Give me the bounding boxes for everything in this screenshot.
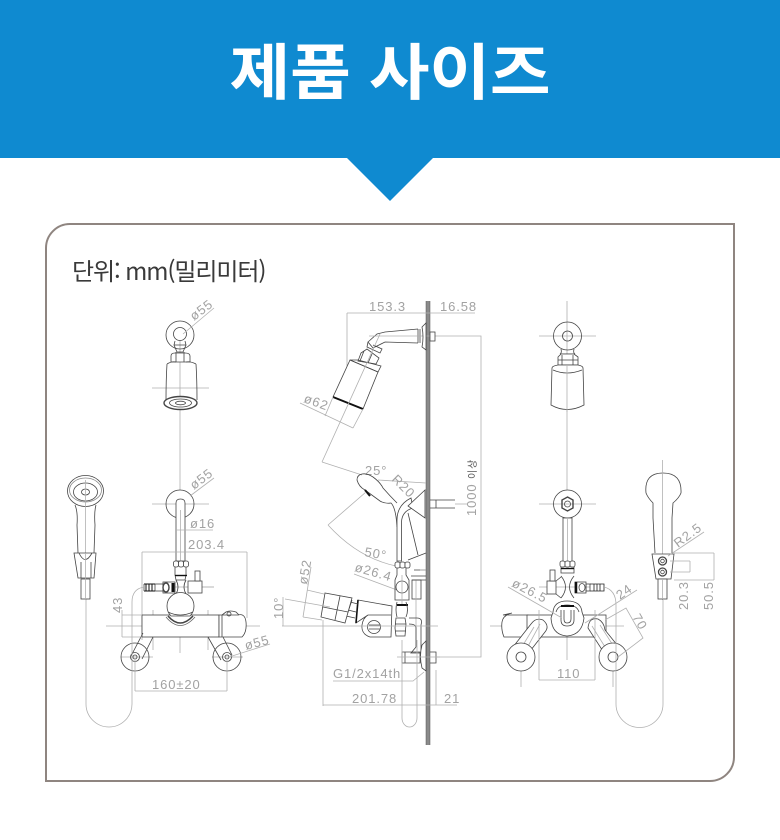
dimension: center spacing 160: 160±20 [152, 677, 201, 692]
wall flange and riser pipe [166, 490, 194, 561]
dimension: 10 degrees: 10° [271, 597, 286, 619]
dimension: 21: 21 [444, 691, 460, 706]
dimension: height 1000: 1000 이상 [464, 459, 479, 516]
dimension: 21 [428, 670, 460, 706]
dimension: 70 [605, 608, 651, 657]
overhead shower front [164, 321, 197, 410]
thermostatic mixer body [142, 561, 246, 637]
panel: dimensions frame [45, 223, 735, 782]
left wall mount rear [507, 619, 547, 671]
angle arc 25 degrees [322, 462, 426, 483]
dimension: 201.78 [323, 620, 428, 706]
dimension: R2.5: R2.5 [671, 520, 705, 550]
dimension: shower diameter 62 [300, 391, 363, 428]
dimension: 24: 24 [613, 581, 635, 602]
hand shower front [68, 476, 104, 600]
dimension: shower diameter 62: ø62 [302, 391, 331, 413]
dimension: wall mount diameter 55: ø55 [243, 632, 271, 653]
dimension: flange diameter 55: ø55 [187, 465, 216, 492]
dimension: 110: 110 [557, 666, 580, 681]
hose [86, 587, 144, 727]
dimension: width 203.4: 203.4 [188, 537, 225, 552]
right wall mount [208, 637, 241, 671]
dimension: 26.4: ø26.4 [353, 559, 394, 584]
angle arc 50 degrees: 50° [363, 544, 388, 563]
dimension: 10 degrees [271, 597, 330, 626]
dimension: diameter 52: ø52 [295, 558, 314, 586]
dimension: wall mount diameter 55 [229, 632, 271, 657]
dimension: 153.3 [347, 299, 428, 400]
dimension: shower diameter 55 [183, 296, 216, 334]
right wall mount rear [588, 619, 627, 671]
flange, hex and riser [554, 490, 582, 562]
center lines and leader [282, 626, 440, 727]
dimension: R20: R20 [389, 472, 418, 501]
dimension: 50.5: 50.5 [701, 581, 716, 610]
dimension: height 43 [110, 597, 142, 637]
overhead shower rear [551, 322, 584, 412]
title: 제품 사이즈 [230, 24, 550, 112]
dimension: 201.78: 201.78 [352, 691, 397, 706]
angle arc 25 degrees: 25° [365, 463, 387, 478]
dimension: pipe diameter 16: ø16 [190, 516, 215, 531]
dimension: width 203.4 [142, 537, 247, 640]
dimension: 70: 70 [629, 611, 651, 633]
header pointer arrow [347, 158, 433, 201]
hose rear [604, 587, 663, 727]
dimension: diameter 52 [295, 558, 324, 620]
dimension: shower diameter 55: ø55 [187, 296, 216, 323]
dimension: pipe diameter 16 [176, 516, 215, 531]
dimension: center spacing 160 [135, 660, 227, 692]
side view: middle drawing [271, 299, 481, 745]
angle arc 50 degrees [328, 492, 396, 566]
dimension: thread G1/2: G1/2x14th [333, 666, 401, 681]
dimension: 20.3 [670, 561, 691, 610]
left wall mount [121, 633, 153, 671]
wall section [426, 301, 430, 745]
hand shower and bracket side [357, 474, 468, 570]
dimension: 153.3: 153.3 [369, 299, 406, 314]
header band [0, 0, 780, 158]
dimension: 110 [539, 610, 595, 681]
center lines [106, 340, 260, 657]
unit label: 단위: mm(밀리미터) [72, 252, 265, 287]
dimension: 50.5 [674, 553, 716, 610]
mixer rear [502, 561, 606, 637]
mixer side [321, 562, 436, 671]
front view: left drawing [68, 296, 271, 727]
dimension: 16.58: 16.58 [440, 299, 477, 314]
dimension: 26.5 [508, 575, 562, 618]
dimension: 24 [585, 581, 637, 623]
rear view: right drawing [490, 301, 716, 727]
dimension: height 43: 43 [110, 597, 125, 613]
dimension: height 1000 [436, 336, 481, 657]
overhead shower side [322, 323, 436, 462]
dimension: 20.3: 20.3 [676, 581, 691, 610]
dimension: 26.5: ø26.5 [510, 575, 550, 606]
center lines [490, 301, 624, 687]
hand shower rear [646, 460, 681, 600]
